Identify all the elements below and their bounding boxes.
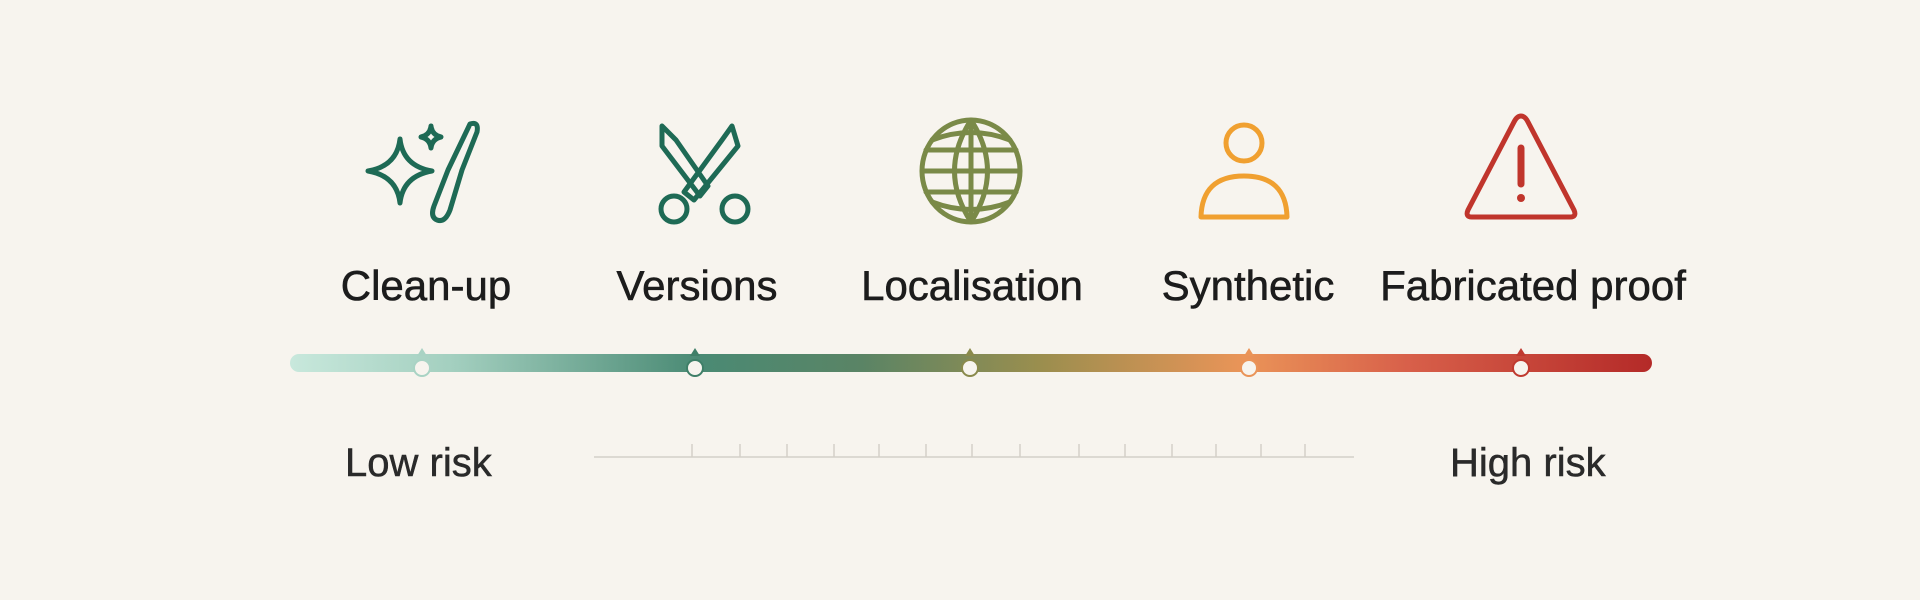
icon row	[366, 114, 1578, 224]
icon: globe (localisation)	[922, 120, 1020, 222]
label: Fabricated proof: Fabricated proof	[1380, 262, 1686, 309]
label: Versions: Versions	[616, 262, 778, 309]
icon: sparkle and scalpel (clean-up)	[368, 123, 477, 221]
icon: scissors (versions)	[661, 126, 748, 222]
tick axis	[594, 444, 1354, 458]
label: Low risk: Low risk	[345, 441, 492, 485]
gradient risk bar with markers	[290, 348, 1652, 377]
icon: person (synthetic)	[1201, 125, 1287, 217]
label: Synthetic: Synthetic	[1162, 262, 1334, 309]
label: High risk: High risk	[1450, 441, 1606, 485]
icon: warning triangle (fabricated proof)	[1467, 116, 1575, 217]
label: Clean-up: Clean-up	[341, 262, 511, 309]
label: Localisation: Localisation	[861, 262, 1083, 309]
